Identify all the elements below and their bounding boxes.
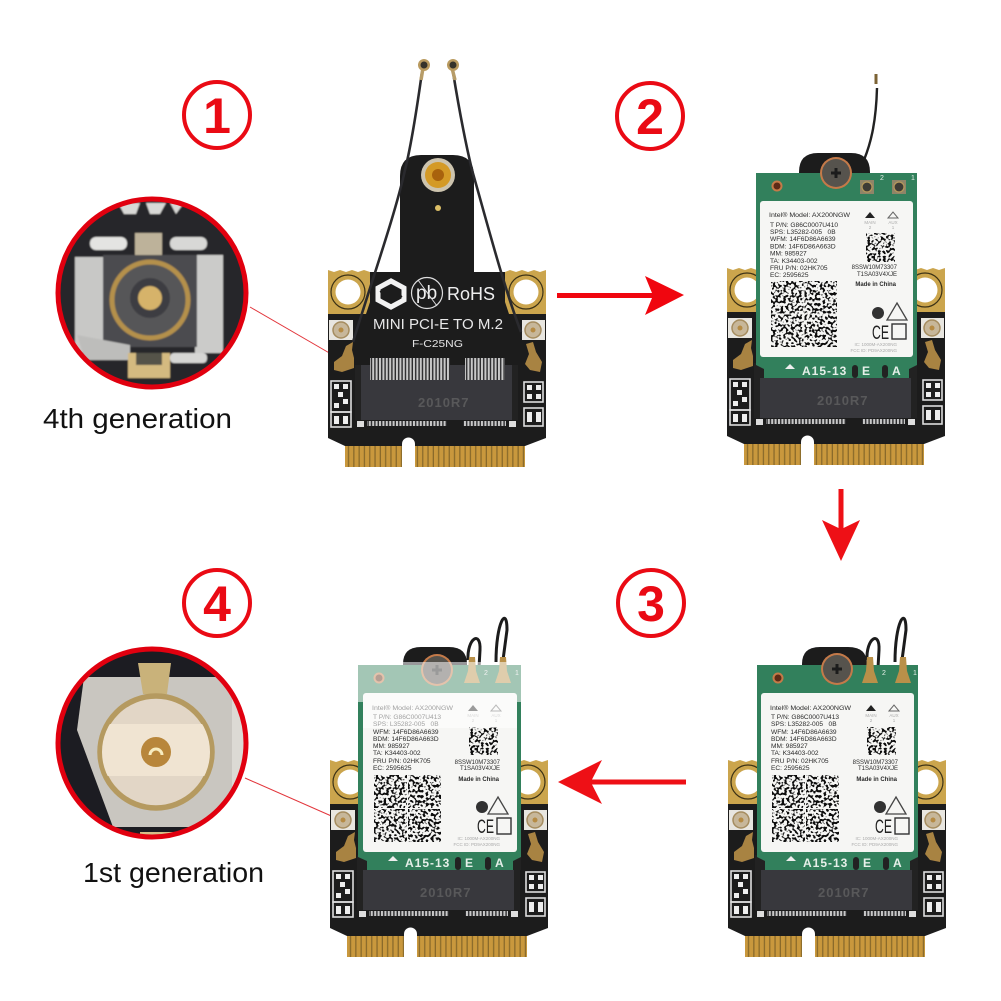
label spec text: MM: 985927 xyxy=(771,743,808,750)
PCB edge markings: E xyxy=(465,856,474,870)
white label xyxy=(760,201,913,357)
step 3 number badge: 3 xyxy=(637,576,665,632)
label spec text: T P/N: G86C0007U413 xyxy=(771,714,839,721)
mounting screw xyxy=(421,654,453,686)
certification marks: CE xyxy=(875,817,892,838)
certification marks: FCC ID: PD9AX200NG xyxy=(453,842,500,847)
antenna cable xyxy=(864,74,877,160)
large data matrix xyxy=(374,775,441,842)
PCB edge markings: E xyxy=(863,856,872,870)
WiFi card xyxy=(756,173,917,378)
gold antenna plugs xyxy=(862,657,911,683)
antenna main and aux marks: 1 xyxy=(893,718,896,723)
label spec text: BDM: 14F6D86A663D xyxy=(770,244,836,250)
step 4 number badge xyxy=(184,570,250,636)
label spec text xyxy=(372,704,454,772)
serial text: Made in China xyxy=(856,777,898,783)
serial text: 8SSW10M73307 xyxy=(455,760,501,766)
PCB edge markings: A15-13 xyxy=(803,856,848,870)
label spec text: MM: 985927 xyxy=(373,743,410,750)
socket numbers xyxy=(882,670,917,677)
step 1 number badge xyxy=(184,82,250,148)
label spec text: BDM: 14F6D86A663D xyxy=(771,736,837,743)
antenna main and aux marks: MAIN xyxy=(865,713,877,718)
serial text: 8SSW10M73307 xyxy=(853,760,899,766)
green PCB xyxy=(358,665,521,870)
magnifier leader line: 1st generation xyxy=(245,778,345,822)
PCB edge markings xyxy=(756,364,917,378)
board: step 2 with card fitted xyxy=(727,74,945,466)
label spec text: Intel® Model: AX200NGW xyxy=(769,211,851,219)
certification marks xyxy=(851,797,909,847)
label spec text: EC: 2595625 xyxy=(771,765,810,772)
serial text: T1SA03V4XJE xyxy=(857,272,897,278)
label spec text: SPS: L35282-005 0B xyxy=(373,721,439,728)
base board xyxy=(328,270,546,468)
logo and RoHS label: pb xyxy=(416,283,437,304)
label spec text: FRU P/N: 02HK705 xyxy=(771,758,829,765)
green PCB xyxy=(756,173,917,378)
serial text: Made in China xyxy=(458,777,500,783)
antenna main and aux marks: AUX xyxy=(889,713,899,718)
PCB edge markings: A xyxy=(893,856,903,870)
certification marks: FCC ID: PD9AX200NG xyxy=(851,842,898,847)
step 2 number badge xyxy=(617,83,683,149)
certification marks: IC: 1000M-AX200NG xyxy=(854,342,897,347)
certification marks: CE xyxy=(477,817,494,838)
certification marks: CE xyxy=(872,323,889,344)
PCB edge markings: E xyxy=(862,364,871,378)
PCB edge markings xyxy=(358,856,521,870)
label spec text: T P/N: G86C0007U410 xyxy=(770,222,838,229)
label spec text: MM: 985927 xyxy=(770,250,807,258)
certification marks xyxy=(850,303,907,353)
PCB edge markings xyxy=(757,856,918,870)
antenna main and aux marks xyxy=(864,212,898,230)
serial text xyxy=(455,760,501,783)
board: step 3 with antennas connected xyxy=(728,618,946,958)
WiFi card xyxy=(757,665,918,870)
magnifier: 4th generation connector xyxy=(50,195,255,395)
label spec text: TA: K34403-002 xyxy=(771,750,819,757)
antenna main and aux marks: MAIN xyxy=(864,220,876,225)
caption: 1st generation: 1st generation xyxy=(83,857,264,888)
gold antenna plugs xyxy=(464,657,511,683)
antenna sockets: 1 xyxy=(911,175,915,182)
socket numbers: 2 xyxy=(484,670,488,677)
label spec text: WFM: 14F6D86A6639 xyxy=(770,236,836,243)
certification marks xyxy=(453,797,511,847)
mounting screw xyxy=(820,157,852,189)
logo and RoHS label xyxy=(378,278,495,308)
label spec text xyxy=(769,211,851,279)
label spec text xyxy=(770,704,852,772)
label spec text: SPS: L35282-005 0B xyxy=(770,229,836,236)
card mount hole xyxy=(772,182,782,190)
socket numbers xyxy=(484,670,519,677)
antenna sockets: 2 xyxy=(880,175,884,182)
antenna main and aux marks: MAIN xyxy=(467,713,479,718)
antenna main and aux marks: AUX xyxy=(888,220,898,225)
socket numbers: 1 xyxy=(515,670,519,677)
small data matrix xyxy=(867,727,896,755)
arrow: step 1 to step 2 xyxy=(557,276,684,315)
black mounting tab xyxy=(802,647,867,672)
magnifier: 1st generation connector xyxy=(50,645,255,845)
board: step 4 with protective film xyxy=(330,618,548,958)
adapter tab with screw post xyxy=(400,155,474,274)
certification marks: IC: 1000M-AX200NG xyxy=(855,836,898,841)
logo and RoHS label: RoHS xyxy=(447,284,495,304)
label spec text: WFM: 14F6D86A6639 xyxy=(373,729,439,736)
board: step 1 adapter xyxy=(328,59,546,468)
certification marks: FCC ID: PD9AX200NG xyxy=(850,348,897,353)
small data matrix xyxy=(469,727,498,755)
WiFi card xyxy=(358,665,521,870)
serial text: 8SSW10M73307 xyxy=(852,265,898,271)
card mount hole xyxy=(374,674,384,682)
antenna main and aux marks: 1 xyxy=(892,225,895,230)
step 3 number badge xyxy=(618,570,684,636)
adapter model text: F-C25NG xyxy=(412,339,463,350)
adapter model text xyxy=(373,316,503,350)
antenna main and aux marks: 2 xyxy=(869,225,872,230)
large data matrix xyxy=(772,775,839,842)
serial text: T1SA03V4XJE xyxy=(858,766,898,772)
antenna main and aux marks xyxy=(865,705,899,723)
label spec text: FRU P/N: 02HK705 xyxy=(373,758,431,765)
antenna main and aux marks: 2 xyxy=(870,718,873,723)
PCB edge markings: A xyxy=(495,856,505,870)
PCB edge markings: A xyxy=(892,364,902,378)
certification marks: IC: 1000M-AX200NG xyxy=(457,836,500,841)
socket numbers: 2 xyxy=(882,670,886,677)
antenna cable loops xyxy=(867,618,906,668)
translucent protective film xyxy=(352,662,528,728)
serial text: T1SA03V4XJE xyxy=(460,766,500,772)
caption: 4th generation: 4th generation xyxy=(43,403,232,434)
antenna main and aux marks xyxy=(467,705,501,723)
label spec text: Intel® Model: AX200NGW xyxy=(372,704,454,712)
label spec text: EC: 2595625 xyxy=(770,272,809,279)
PCB edge markings: A15-13 xyxy=(405,856,450,870)
small data matrix xyxy=(866,233,895,262)
step 4 number badge: 4 xyxy=(203,576,231,632)
antenna sockets xyxy=(860,175,915,194)
label spec text: TA: K34403-002 xyxy=(373,750,421,757)
card mount hole xyxy=(774,674,782,682)
antenna main and aux marks: 1 xyxy=(495,718,498,723)
label spec text: FRU P/N: 02HK705 xyxy=(770,265,828,272)
label spec text: SPS: L35282-005 0B xyxy=(771,721,837,728)
label spec text: EC: 2595625 xyxy=(373,765,412,772)
adapter model text: MINI PCI-E TO M.2 xyxy=(373,316,503,333)
magnifier leader line: 4th generation xyxy=(250,307,338,358)
socket numbers: 1 xyxy=(913,670,917,677)
serial text xyxy=(853,760,899,783)
label spec text: TA: K34403-002 xyxy=(770,258,818,265)
large data matrix xyxy=(771,281,837,347)
arrow: step 2 to step 3 xyxy=(822,489,860,561)
antenna cables xyxy=(353,59,521,342)
step 1 number badge: 1 xyxy=(203,88,231,144)
arrow: step 3 to step 4 xyxy=(558,760,686,804)
white label xyxy=(761,693,914,852)
step 2 number badge: 2 xyxy=(636,89,664,145)
serial text xyxy=(852,265,898,288)
base board xyxy=(728,760,946,958)
black mounting tab xyxy=(403,647,467,672)
label spec text: BDM: 14F6D86A663D xyxy=(373,736,439,743)
mounting screw xyxy=(821,653,853,685)
antenna main and aux marks: AUX xyxy=(491,713,501,718)
label spec text: T P/N: G86C0007U413 xyxy=(373,714,441,721)
PCB edge markings: A15-13 xyxy=(802,364,847,378)
base board xyxy=(727,268,945,466)
antenna main and aux marks: 2 xyxy=(472,718,475,723)
serial text: Made in China xyxy=(855,282,897,288)
green PCB xyxy=(757,665,918,870)
antenna cable loops xyxy=(468,618,507,668)
label spec text: WFM: 14F6D86A6639 xyxy=(771,729,837,736)
label spec text: Intel® Model: AX200NGW xyxy=(770,704,852,712)
black mounting tab xyxy=(799,153,870,180)
white label xyxy=(363,693,517,852)
base board xyxy=(330,760,548,958)
